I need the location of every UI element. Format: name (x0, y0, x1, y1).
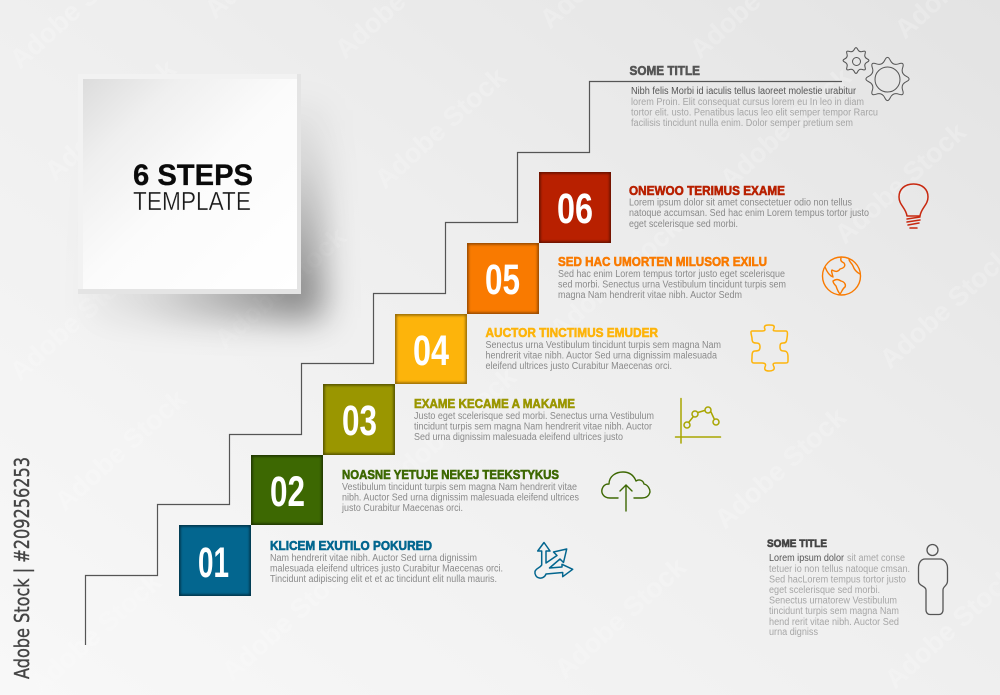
step 05 square (467, 243, 539, 314)
icon: light bulb (899, 184, 928, 228)
text block: step 01: KLICEM EXUTILO POKURED (270, 538, 432, 553)
text block: bottom some title: tincidunt turpis sem magna Nam (769, 606, 899, 617)
text block: step 06: ONEWOO TERIMUS EXAME (629, 183, 785, 198)
icon: person (918, 544, 948, 614)
text block: step 04: AUCTOR TINCTIMUS EMUDER (486, 325, 659, 340)
watermark pattern: Adobe Stock (544, 211, 687, 344)
number 02: 02 (270, 468, 305, 516)
text block: step 06 (629, 183, 869, 230)
step 01 square (179, 525, 251, 596)
icon: cloud upload (602, 472, 650, 511)
text block: step 04: hendrerit vitae nibh. Auctor Sed urna dignissim malesuada (486, 350, 717, 362)
text block: step 04: Senectus urna Vestibulum tincidunt turpis sem magna Nam (486, 340, 721, 351)
text block: step 02: nibh. Auctor Sed urna dignissim malesuada eleifend ultrices (342, 492, 579, 504)
text block: step 01: malesuada eleifend ultrices justo Curabitur Maecenas orci. (270, 564, 503, 574)
watermark pattern: Adobe Stock (39, 53, 182, 186)
text block: step 02: Vestibulum tincidunt turpis sem magna Nam hendrerit vitae (342, 482, 577, 493)
number 06: 06 (557, 185, 593, 233)
icon: puzzle piece (751, 325, 788, 371)
watermark pattern: Adobe Stock (209, 221, 352, 354)
text block: step 02 (341, 467, 579, 514)
number 04: 04 (413, 327, 449, 375)
watermark pattern: Adobe Stock (379, 361, 522, 494)
watermark pattern: Adobe Stock (4, 253, 147, 386)
text block: bottom some title: tetuer io non tellus natoque cmsan. (769, 564, 910, 575)
text block: bottom some title (767, 538, 910, 638)
text block: bottom some title: urna digniss (769, 627, 818, 638)
watermark pattern: Adobe Stock (829, 116, 972, 249)
text block: top some title: SOME TITLE (630, 63, 700, 78)
text block: bottom some title: hend rerit vitae nibh. Auctor Sed (769, 617, 899, 628)
text block: step 02: NOASNE YETUJE NEKEJ TEEKSTYKUS (342, 467, 559, 482)
text block: top some title (630, 63, 878, 129)
number 05: 05 (485, 256, 520, 304)
icon: line chart (676, 398, 720, 443)
text block: bottom some title: sit amet conse (847, 553, 905, 564)
watermark pattern: Adobe Stock (549, 551, 692, 684)
icon: diverging arrows (535, 542, 573, 578)
watermark pattern: Adobe Stock (369, 61, 512, 194)
step 02 square (251, 455, 323, 525)
big square panel (78, 74, 322, 318)
number 03: 03 (342, 397, 377, 445)
staircase line (86, 82, 842, 645)
text block: step 05: sed morbi. Senectus urna Vestibulum tincidunt turpis sem (558, 280, 786, 290)
text block: step 03: tincidunt turpis sem magna Nam hendrerit vitae nibh. Auctor (414, 422, 653, 432)
text block: step 05: Sed hac enim Lorem tempus tortor justo eget scelerisque (558, 269, 785, 280)
text block: step 06: eget scelerisque sed morbi. (629, 219, 738, 230)
text block: step 04: eleifend ultrices justo Curabitur Maecenas orci. (486, 361, 672, 372)
text block: step 03: Sed urna dignissim malesuada eleifend ultrices justo (414, 432, 623, 443)
panel shadow (95, 110, 322, 318)
watermark pattern: Adobe Stock (49, 383, 192, 516)
text block: step 01: Tincidunt adipiscing elit et et ac tincidunt elit nulla mauris. (270, 574, 497, 585)
number 01: 01 (198, 539, 229, 587)
text block: step 01: Nam hendrerit vitae nibh. Auctor Sed urna dignissim (270, 553, 477, 564)
text block: bottom some title: Sed hacLorem tempus tortor justo (769, 574, 906, 586)
text block: step 06: natoque accumsan. Sed hac enim Lorem tempus tortor justo (629, 208, 869, 219)
text block: top some title: tortor elit. usto. Penatibus lacus leo elit semper tempor Rarcu (631, 108, 878, 118)
title: 6 steps: 6 STEPS (133, 159, 253, 192)
text block: step 04 (486, 325, 721, 372)
text block: step 05 (558, 254, 786, 301)
text block: top some title: Nibh felis Morbi id iaculis tellus laoreet molestie urabitur (631, 86, 857, 97)
step 03 square (323, 384, 395, 455)
text block: step 01 (270, 538, 503, 585)
text block: step 02: justo Curabitur Maecenas orci. (341, 503, 463, 514)
text block: bottom some title: Lorem ipsum dolor (769, 553, 845, 564)
step 06 square (539, 172, 611, 243)
watermark pattern: Adobe Stock (714, 61, 857, 194)
text block: step 03: EXAME KECAME A MAKAME (414, 396, 575, 411)
text block: bottom some title: SOME TITLE (767, 538, 827, 550)
text block: step 03: Justo eget scelerisque sed morbi. Senectus urna Vestibulum (414, 411, 654, 422)
text block: step 05: magna Nam hendrerit vitae nibh. Auctor Sedm (558, 290, 742, 301)
text block: step 03 (414, 396, 654, 443)
watermark pattern: Adobe Stock (216, 553, 359, 686)
watermark pattern: Adobe Stock (709, 401, 852, 534)
text block: bottom some title: eget scelerisque sed morbi. (769, 585, 880, 596)
text block: top some title: lorem Proin. Elit consequat cursus lorem eu In leo in diam (631, 97, 864, 108)
icon: globe (822, 257, 860, 295)
text block: step 05: SED HAC UMORTEN MILUSOR EXILU (558, 254, 767, 269)
text block: top some title: facilisis tincidunt nulla enim. Dolor semper pretium sem (631, 118, 853, 129)
step 04 square (395, 314, 467, 384)
icon: gears (843, 48, 909, 101)
text block: step 06: Lorem ipsum dolor sit amet consectetuer odio non tellus (629, 198, 852, 208)
stock id label: Adobe Stock | #209256253 (10, 457, 34, 679)
title: template: TEMPLATE (133, 186, 251, 216)
text block: bottom some title: Senectus urnatorew Vestibulum (769, 596, 897, 606)
